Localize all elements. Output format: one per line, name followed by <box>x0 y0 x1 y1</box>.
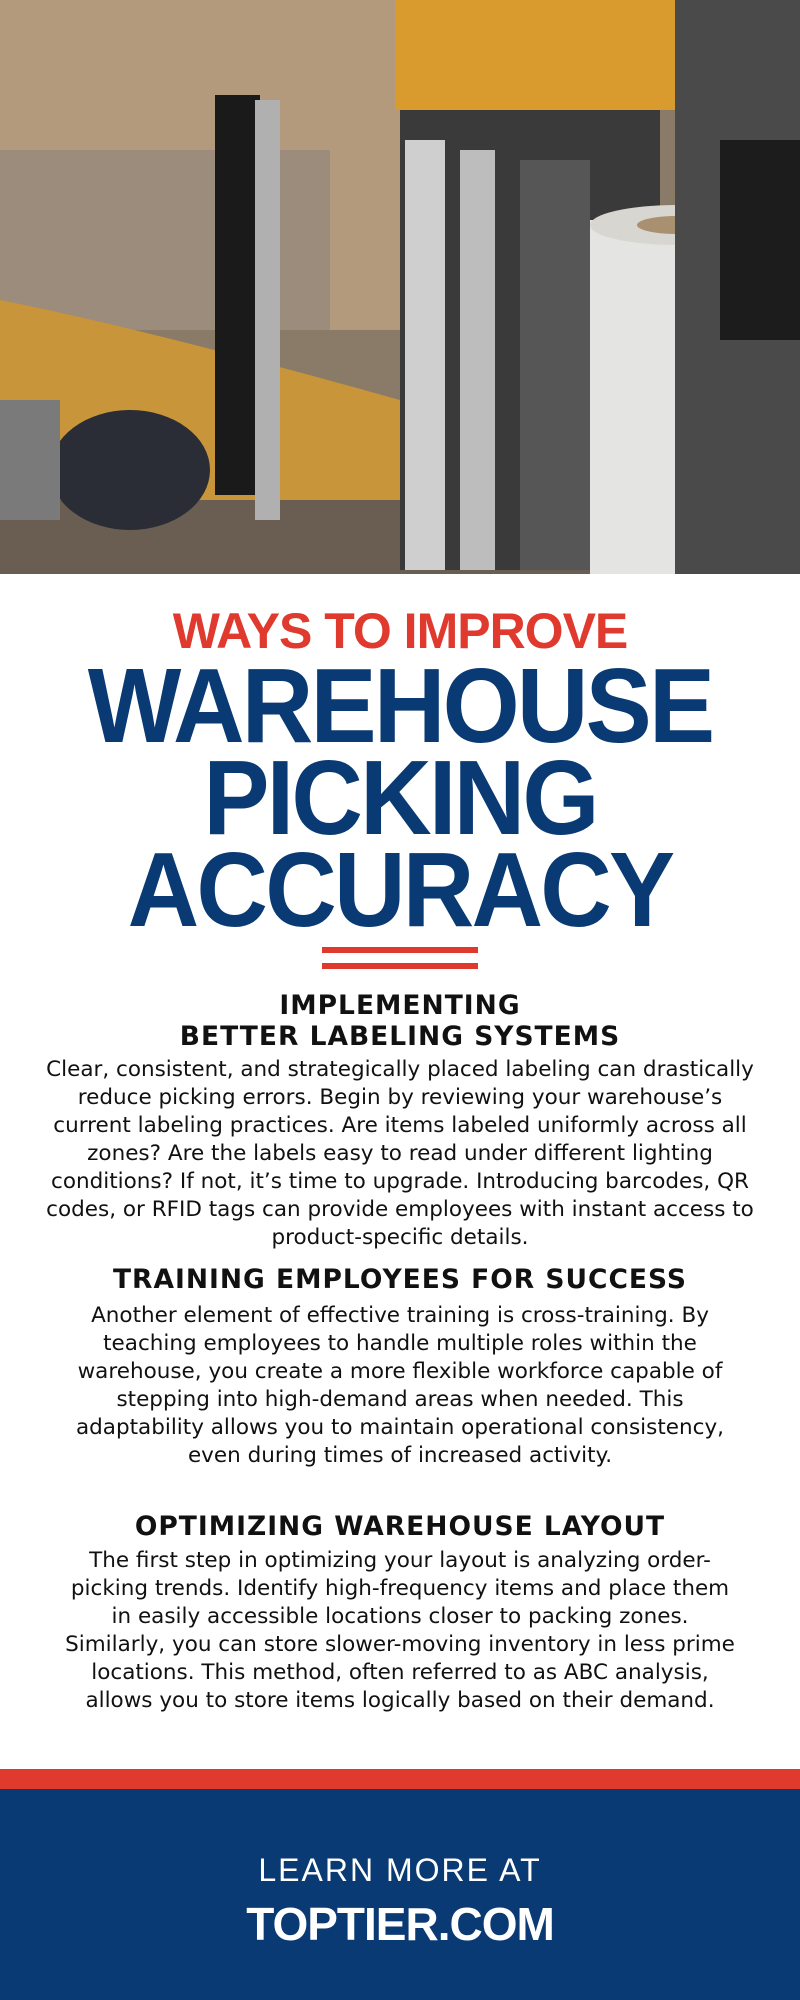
footer: learn more: LEARN MORE AT <box>258 1852 542 1888</box>
red band <box>0 1769 800 1789</box>
footer <box>0 1789 800 2000</box>
photo: stretch wrapping machine <box>0 0 800 574</box>
section 3 heading: OPTIMIZING WAREHOUSE LAYOUT <box>135 1511 665 1542</box>
section 2 heading: TRAINING EMPLOYEES FOR SUCCESS <box>113 1264 687 1295</box>
title: main heading: WAREHOUSE <box>88 647 712 765</box>
footer: url: TOPTIER.COM <box>246 1898 554 1950</box>
section 1 text: Clear, consistent, and strategically placed labeling can drastically reduce picking errors. Begin by reviewing your warehouse’s current labeling practices. Are items labeled uniformly across all zones? Are the labels easy to read under different lighting conditions? If not, it’s time to upgrade. Introducing barcodes, QR codes, or RFID tags can provide employees with instant access to product-specific details. <box>46 1057 754 1250</box>
title: ways to improve: WAYS TO IMPROVE <box>173 603 627 659</box>
section 1 heading <box>180 990 620 1052</box>
title: main heading: ACCURACY <box>128 831 672 949</box>
decorative red lines <box>322 947 478 969</box>
section 1 heading: BETTER LABELING SYSTEMS <box>180 1021 620 1052</box>
section 3 text: The first step in optimizing your layout is analyzing order-picking trends. Identify high-frequency items and place them in easily accessible locations closer to packing zones. Similarly, you can store slower-moving inventory in less prime locations. This method, often referred to as ABC analysis, allows you to store items logically based on their demand. <box>65 1548 735 1713</box>
title: main heading <box>88 647 712 949</box>
section 2 text: Another element of effective training is cross-training. By teaching employees to handle multiple roles within the warehouse, you create a more flexible workforce capable of stepping into high-demand areas when needed. This adaptability allows you to maintain operational consistency, even during times of increased activity. <box>76 1303 724 1468</box>
title: main heading: PICKING <box>203 739 597 857</box>
section 1 heading: IMPLEMENTING <box>279 990 521 1021</box>
